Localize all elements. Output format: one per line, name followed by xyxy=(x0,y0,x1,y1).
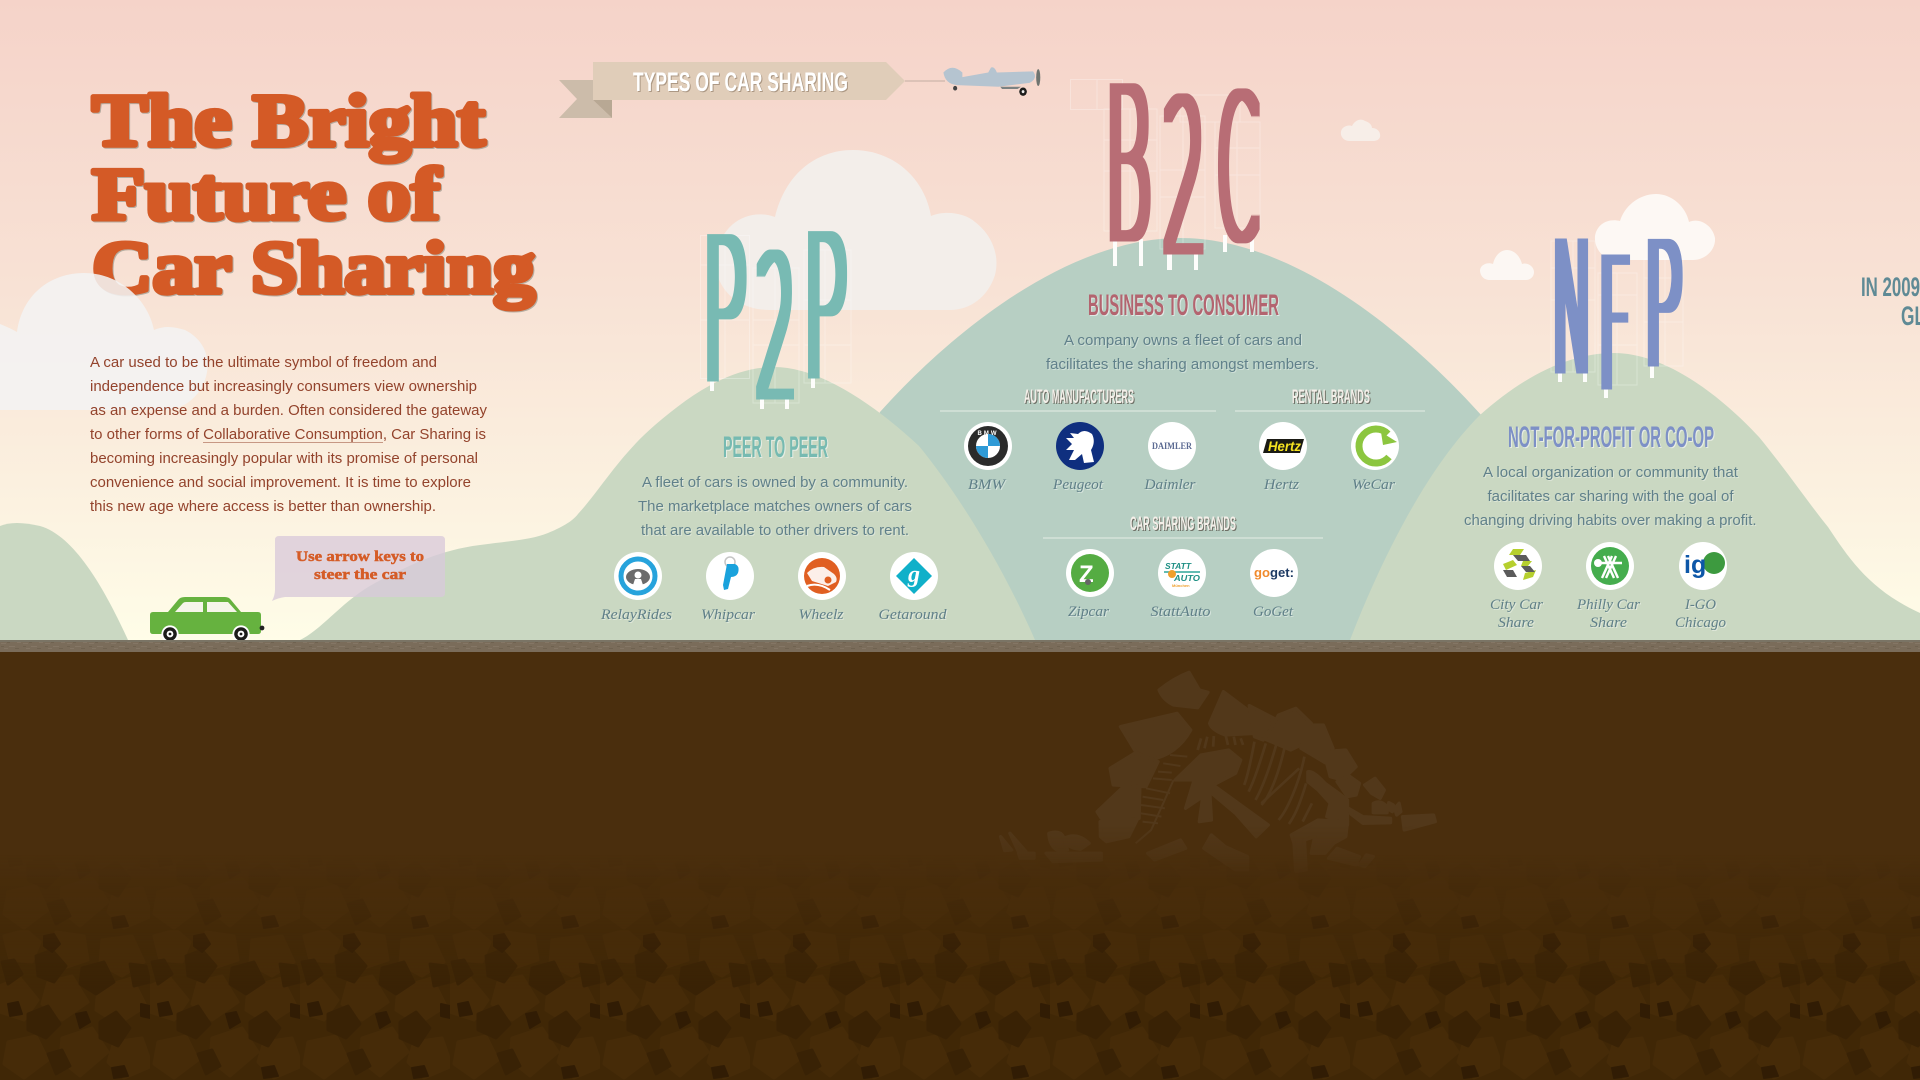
P2P construction grid xyxy=(700,235,851,403)
icon: Getaround: g xyxy=(907,562,920,588)
callout: arrow keys: steer the car xyxy=(314,567,407,583)
NFP text xyxy=(1552,205,1683,431)
icon: Zipcar xyxy=(1066,549,1114,597)
brand labels: not for profit: I-GO xyxy=(1684,597,1716,613)
panel: business to consumer: AUTO MANUFACTURERS xyxy=(1024,387,1134,408)
B2C text: C xyxy=(1217,52,1259,286)
brand labels: car sharing xyxy=(1068,604,1294,620)
brand labels: manufacturers and rentals: BMW xyxy=(968,477,1007,493)
title: Future of xyxy=(92,154,442,236)
NFP text: P xyxy=(1644,207,1683,406)
description: not for profit xyxy=(1464,464,1756,529)
ground strip xyxy=(0,640,1920,652)
icon: Daimler xyxy=(1148,422,1196,470)
NFP text: N xyxy=(1552,205,1592,415)
icon: Zipcar: Z xyxy=(1079,561,1094,588)
description: business to consumer: facilitates the sharing amongst members. xyxy=(1046,356,1319,373)
soil pebble texture xyxy=(0,915,1920,1079)
brand labels: manufacturers and rentals: Daimler xyxy=(1143,477,1196,493)
icon: StattAuto: AUTO xyxy=(1173,574,1201,583)
brand labels: not for profit: City Car xyxy=(1490,597,1543,613)
intro paragraph: this new age where access is better than ownership. xyxy=(90,498,436,515)
B2C text xyxy=(1105,44,1259,304)
sky background xyxy=(0,0,1920,642)
brand labels: car sharing: StattAuto xyxy=(1150,604,1211,620)
text: next section cut off at edge xyxy=(1861,272,1920,331)
hill: peer to peer xyxy=(300,367,1035,640)
icon: GoGet: goget: xyxy=(1254,565,1294,580)
banner body xyxy=(593,62,905,100)
description: not for profit: facilitates car sharing with the goal of xyxy=(1488,488,1734,505)
hill: not for profit xyxy=(1350,353,1920,640)
intro paragraph: as an expense and a burden. Often considered the gateway xyxy=(90,402,487,419)
callout: arrow keys: Use arrow keys to xyxy=(296,549,424,565)
description: business to consumer xyxy=(1046,332,1319,373)
P2P text xyxy=(702,194,848,445)
panel: business to consumer xyxy=(940,289,1425,620)
intro paragraph: A car used to be the ultimate symbol of freedom and xyxy=(90,354,437,371)
icon: StattAuto: München xyxy=(1172,583,1190,588)
icon: GoGet xyxy=(1250,549,1298,597)
cloud: left xyxy=(0,273,208,410)
icon: BMW xyxy=(964,422,1012,470)
description: not for profit: changing driving habits over making a profit. xyxy=(1464,512,1756,529)
B2C text: B xyxy=(1105,44,1151,291)
P2P text: P xyxy=(702,197,747,428)
intro paragraph: convenience and social improvement. It is time to explore xyxy=(90,474,471,491)
P2P text: 2 xyxy=(756,214,796,445)
panel: business to consumer: RENTAL BRANDS xyxy=(1292,387,1370,408)
banner tail xyxy=(559,80,612,118)
brand labels: not for profit: Share xyxy=(1498,615,1534,631)
icon: RelayRides xyxy=(614,552,662,600)
brand labels: manufacturers and rentals: Peugeot xyxy=(1052,477,1104,493)
hill: business to consumer xyxy=(780,238,1700,640)
icon: StattAuto: STATT xyxy=(1165,562,1192,571)
NFP construction grid xyxy=(1551,241,1683,385)
intro paragraph: becoming increasingly popular with its promise of personal xyxy=(90,450,478,467)
title: Car Sharing xyxy=(92,228,535,310)
icon: WeCar xyxy=(1351,422,1399,470)
icon: I-GO: ig xyxy=(1684,551,1706,579)
banner text: TYPES OF CAR SHARING xyxy=(633,67,848,97)
description: business to consumer: A company owns a fleet of cars and xyxy=(1064,332,1302,349)
icon: airplane xyxy=(943,67,1040,96)
brand labels: peer to peer: Getaround xyxy=(878,607,947,623)
soil xyxy=(0,650,1920,1080)
brand labels: manufacturers and rentals: Hertz xyxy=(1263,477,1299,493)
brand labels: not for profit xyxy=(1490,597,1726,631)
B2C feet xyxy=(1113,235,1254,270)
brand labels: peer to peer xyxy=(600,607,947,623)
letters: P2P xyxy=(700,194,851,445)
icon: Getaround xyxy=(890,552,938,600)
tow rope xyxy=(905,80,945,82)
brand labels: car sharing: Zipcar xyxy=(1068,604,1109,620)
icon: Whipcar xyxy=(706,552,754,600)
cloud: behind NFP xyxy=(1595,194,1715,260)
icon: Daimler: DAIMLER xyxy=(1152,441,1192,451)
icon: green car xyxy=(150,597,264,643)
brand labels: not for profit: Share xyxy=(1590,615,1627,631)
panel: business to consumer: BUSINESS TO CONSUMER xyxy=(1088,289,1279,322)
panel: not for profit xyxy=(1464,421,1756,631)
icon: StattAuto xyxy=(1158,549,1206,597)
banner fold xyxy=(593,100,612,118)
P2P text: P xyxy=(803,194,848,425)
icon: Philly Car Share xyxy=(1586,542,1634,590)
brand labels: peer to peer: Wheelz xyxy=(798,607,844,623)
title xyxy=(92,80,535,310)
cloud: large behind P2P xyxy=(716,150,996,310)
intro paragraph: to other forms of Collaborative Consumption, Car Sharing is xyxy=(90,426,486,443)
small hill far left xyxy=(0,523,128,640)
banner xyxy=(559,62,905,118)
intro paragraph xyxy=(90,354,487,515)
brand labels: not for profit: Chicago xyxy=(1675,615,1726,631)
B2C text: 2 xyxy=(1162,57,1206,304)
letters: B2C xyxy=(1070,44,1260,304)
description: peer to peer xyxy=(638,474,912,539)
description: peer to peer: A fleet of cars is owned by a community. xyxy=(642,474,908,491)
icon: BMW: BMW xyxy=(978,431,998,437)
cloud: small by NFP xyxy=(1480,250,1534,280)
heading: not for profit: NOT-FOR-PROFIT OR CO-OP xyxy=(1508,421,1714,454)
cloud: small near B2C xyxy=(1341,120,1380,141)
description: peer to peer: that are available to other drivers to rent. xyxy=(641,522,909,539)
B2C construction grid xyxy=(1070,79,1260,249)
intro paragraph: independence but increasingly consumers view ownership xyxy=(90,378,477,395)
icon: Hertz xyxy=(1259,422,1307,470)
icon: Peugeot xyxy=(1056,422,1104,470)
NFP text: F xyxy=(1598,220,1631,431)
NFP feet xyxy=(1558,366,1654,398)
description: peer to peer: The marketplace matches owners of cars xyxy=(638,498,912,515)
brand labels: not for profit: Philly Car xyxy=(1576,597,1640,613)
callout: arrow keys xyxy=(272,536,445,601)
description: not for profit: A local organization or community that xyxy=(1483,464,1739,481)
panel: peer to peer xyxy=(600,431,947,623)
icon: Wheelz xyxy=(798,552,846,600)
brand labels: peer to peer: RelayRides xyxy=(600,607,672,623)
brand labels: manufacturers and rentals: WeCar xyxy=(1352,477,1395,493)
title: The Bright xyxy=(92,80,485,162)
brand labels: peer to peer: Whipcar xyxy=(701,607,755,623)
icon: Hertz: Hertz xyxy=(1268,438,1301,454)
panel: business to consumer: CAR SHARING BRANDS xyxy=(1130,514,1236,535)
fossil: stegosaurus xyxy=(999,671,1437,844)
brand labels: manufacturers and rentals xyxy=(968,477,1395,493)
panel: peer to peer: PEER TO PEER xyxy=(723,431,828,464)
brand labels: car sharing: GoGet xyxy=(1253,604,1294,620)
icon: City Car Share xyxy=(1494,542,1542,590)
P2P feet xyxy=(710,378,815,409)
letters: NFP xyxy=(1551,205,1683,431)
icon: I-GO xyxy=(1679,542,1727,590)
